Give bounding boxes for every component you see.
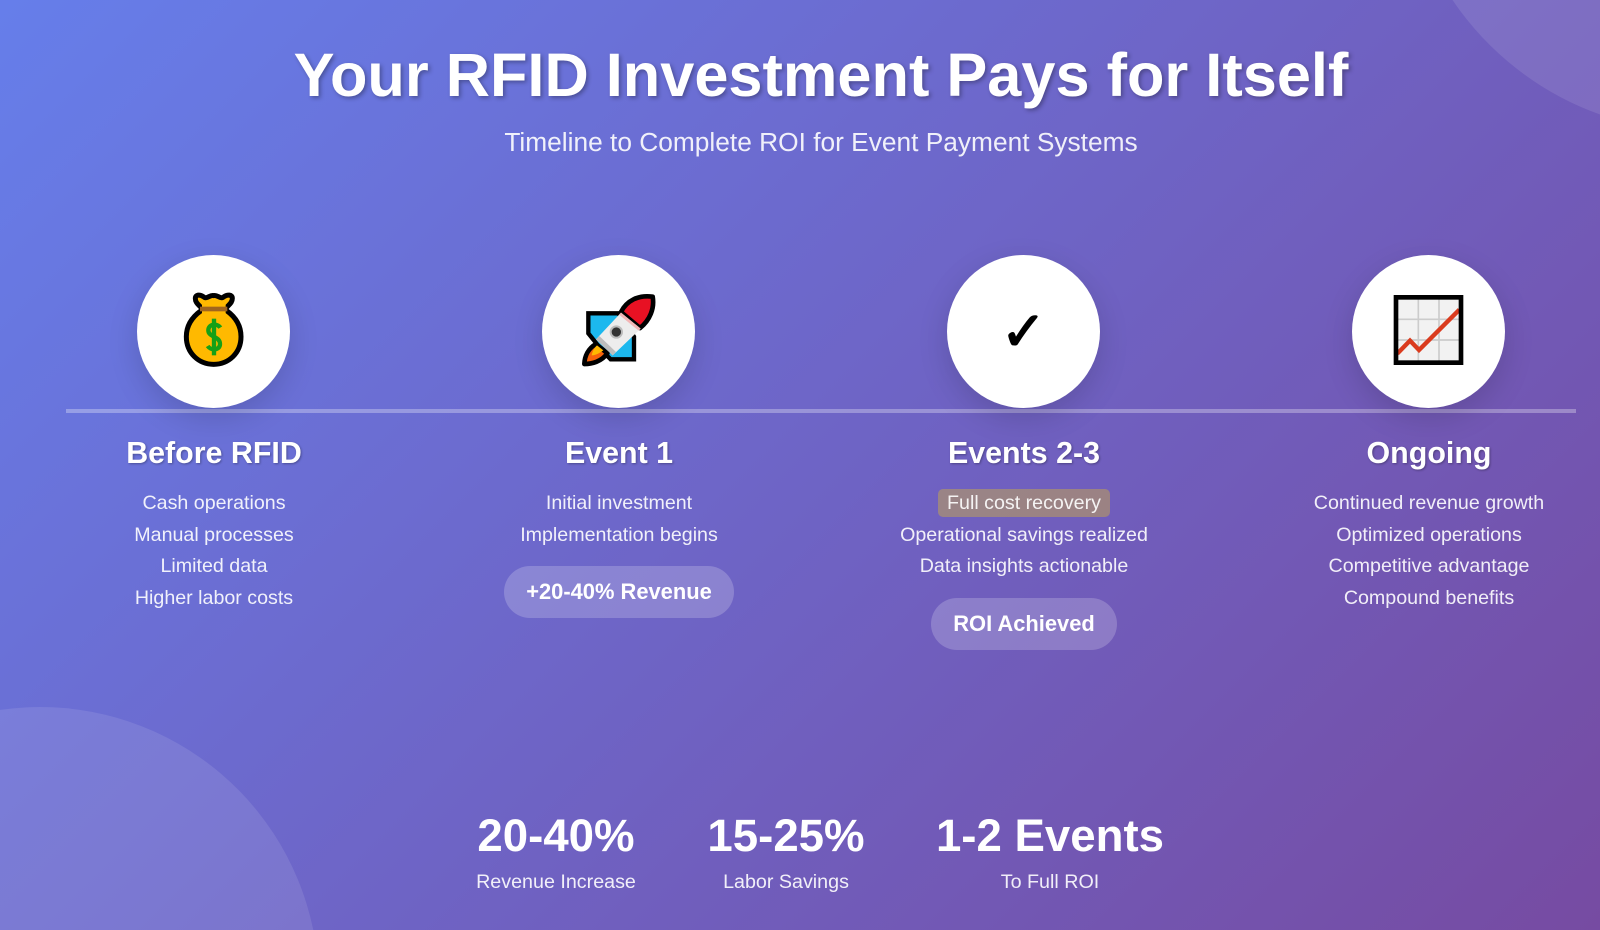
icon: rocket [542, 255, 695, 408]
list: Events 2-3 points: Data insights actionable [920, 555, 1128, 577]
stat label: Labor Savings [723, 871, 849, 893]
list: Events 2-3 points: Full cost recovery [947, 492, 1101, 514]
list: Events 2-3 points [900, 489, 1148, 577]
heading: Before RFID: Before RFID [126, 436, 302, 470]
list: Events 2-3 points: Operational savings realized [900, 524, 1148, 546]
timeline stage: Ongoing [1314, 255, 1544, 609]
stat: labor savings [707, 810, 865, 893]
list: Ongoing points [1314, 492, 1544, 609]
stat value: 15-25% [707, 810, 865, 861]
list: Before RFID points: Cash operations [142, 492, 286, 514]
list: Ongoing points: Optimized operations [1336, 524, 1522, 546]
timeline stage: Before RFID [126, 255, 302, 609]
icon: check mark [947, 255, 1100, 408]
stat: events to ROI [936, 810, 1164, 893]
icon: check mark: ✓ [1001, 300, 1046, 363]
badge: revenue [504, 566, 734, 618]
stat label: Revenue Increase [476, 871, 636, 893]
stat label: To Full ROI [1001, 871, 1099, 893]
list: Before RFID points: Manual processes [134, 524, 294, 546]
icon: money bag [137, 255, 290, 408]
stat value: 20-40% [477, 810, 635, 861]
list: Before RFID points: Limited data [160, 555, 268, 577]
timeline stage: Events 2-3 [900, 255, 1148, 650]
list: Event 1 points: Initial investment [546, 492, 692, 514]
timeline stage: Event 1 [504, 255, 734, 618]
stat value: 1-2 Events [936, 810, 1164, 861]
badge: ROI achieved: ROI Achieved [953, 611, 1095, 636]
heading: Events 2-3: Events 2-3 [948, 436, 1100, 470]
heading: Event 1: Event 1 [565, 436, 673, 470]
title: Your RFID Investment Pays for Itself [294, 41, 1348, 109]
subtitle: Timeline to Complete ROI for Event Payment Systems [504, 127, 1138, 157]
list: Ongoing points: Continued revenue growth [1314, 492, 1544, 514]
list: Event 1 points: Implementation begins [520, 524, 718, 546]
list: Before RFID points: Higher labor costs [135, 587, 293, 609]
list: Event 1 points [520, 492, 718, 546]
badge: revenue: +20-40% Revenue [526, 579, 712, 604]
heading: Ongoing: Ongoing [1367, 436, 1491, 470]
list: Before RFID points [134, 492, 294, 609]
icon: growth chart [1352, 255, 1505, 408]
list: Ongoing points: Competitive advantage [1329, 555, 1529, 577]
stat: revenue increase [476, 810, 636, 893]
list: Ongoing points: Compound benefits [1344, 587, 1514, 609]
badge: ROI achieved [931, 598, 1117, 650]
